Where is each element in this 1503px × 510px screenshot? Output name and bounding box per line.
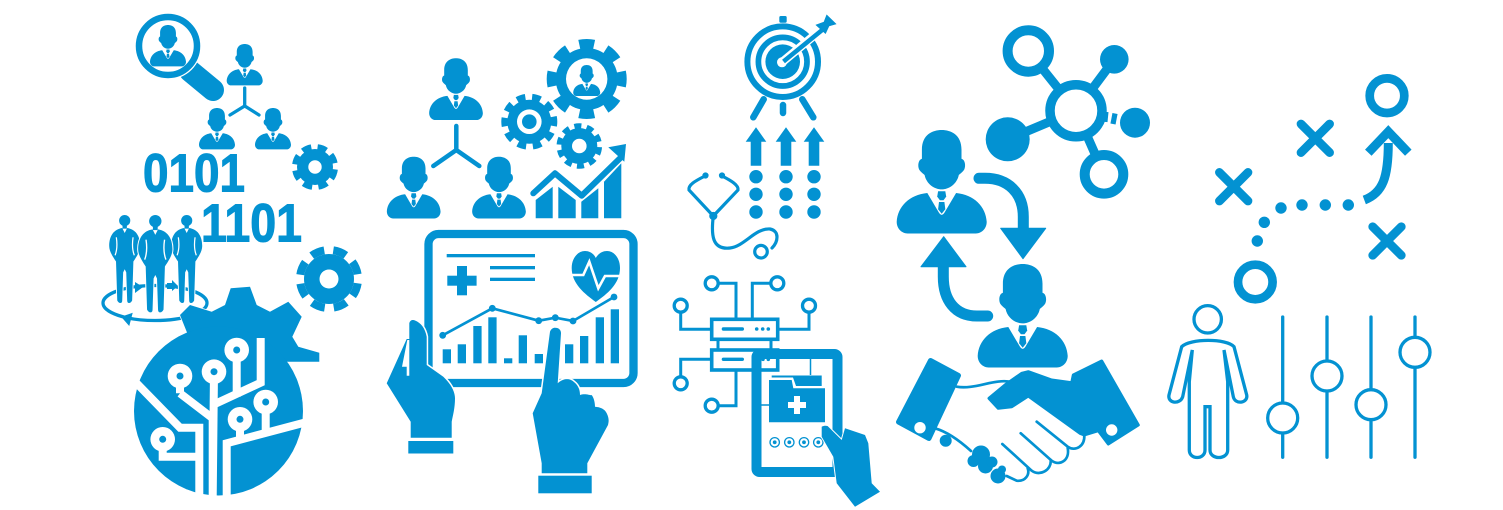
icon: three connected people [199, 44, 291, 149]
icon: large gear [291, 241, 367, 317]
icon: team on rotating ring [103, 215, 207, 325]
arrow: curved down [979, 178, 1046, 259]
icon: slider controls [1268, 317, 1430, 457]
icon: dots under arrows [749, 170, 821, 219]
icon: medium gear [505, 97, 554, 146]
panel: data and team icons [103, 12, 367, 497]
icon: hand on tablet [822, 426, 880, 507]
panel: analytics dashboard [387, 44, 634, 493]
icon: server network [674, 277, 816, 412]
binary text: 1101: 1101 [201, 194, 302, 254]
icon: person bottom [978, 264, 1068, 368]
icon: target rays [753, 99, 813, 117]
icon: up arrows [746, 127, 824, 166]
icon: target with arrow [747, 15, 836, 97]
icon: circuit tree in gear [134, 287, 319, 497]
icon: small gear [289, 141, 341, 193]
icon: growth chart with arrow [533, 144, 626, 218]
icon: person top [897, 130, 987, 234]
icon: strategy play diagram [1219, 78, 1408, 299]
tablet header lines and medical cross [447, 254, 535, 295]
icon: person outline [1169, 306, 1247, 458]
icon: tablet with medical folder [756, 354, 838, 472]
arrow: curved up [921, 237, 988, 316]
panel: strategy and personalisation [1169, 78, 1430, 458]
icon: left hand [387, 320, 455, 454]
binary text: 0101: 0101 [143, 144, 245, 204]
icon: three connected people [387, 58, 526, 218]
panel: health targets and records [674, 15, 880, 507]
icon: small gear [555, 122, 604, 170]
bar and line chart [439, 294, 619, 363]
icon: right hand pointing [533, 328, 609, 493]
icon: network nodes [986, 30, 1150, 194]
icon: handshake [898, 360, 1138, 484]
icon: magnifying glass with person [134, 12, 213, 90]
panel: partnership and network [897, 30, 1150, 484]
icon: stethoscope [689, 174, 777, 258]
icon: gear with person [552, 44, 621, 114]
icon: heart with pulse [571, 251, 621, 302]
tablet frame [428, 234, 634, 383]
